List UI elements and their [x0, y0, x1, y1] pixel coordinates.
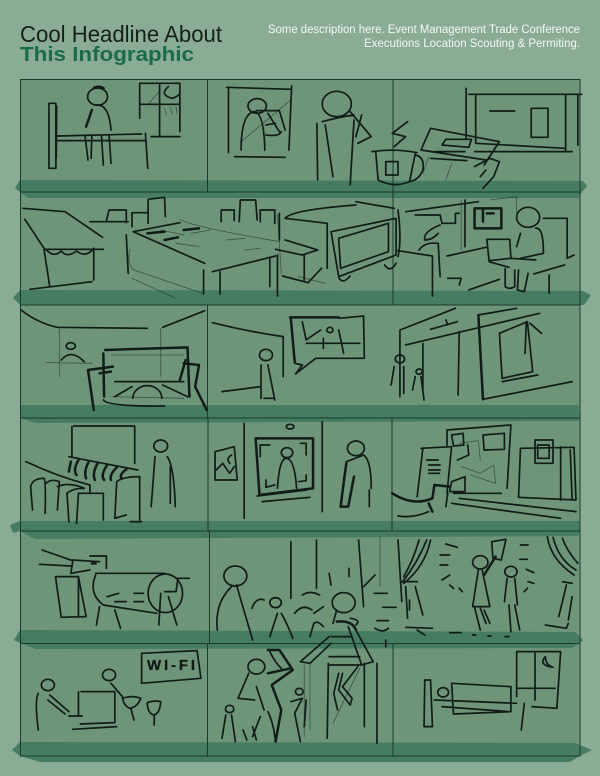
panel: hands holding up phone: [21, 310, 207, 410]
panel: people at doorway: [391, 308, 572, 400]
panel: person at mirror: [227, 86, 371, 185]
description text: Some description here. Event Management Trade Conference: [268, 24, 580, 36]
panel: hand pointing at pinboard: [392, 425, 576, 518]
shelf bands: [10, 180, 592, 762]
description text: Executions Location Scouting & Permiting.: [364, 38, 580, 50]
description text: [268, 24, 580, 50]
title: Cool Headline About: [20, 21, 223, 47]
row 2 and 3 sketches: [21, 197, 574, 410]
panel: hand placing paper on barrel: [39, 550, 189, 628]
row 4 sketches: [26, 422, 576, 523]
rows 5 and 6 sketches: [36, 537, 578, 743]
panel: market stall, street and truck: [23, 197, 400, 298]
panel: person asleep in bed at night: [424, 652, 561, 730]
panel: person with speech bubble: [212, 316, 364, 400]
panel: coffee and notes before board: [372, 88, 582, 188]
wi-fi sign text: WI-FI: [147, 657, 195, 674]
title: This Infographic: [20, 44, 194, 66]
row 1 sketches: [49, 83, 582, 188]
panel: singer and crowd on stage: [217, 537, 578, 743]
panel: wi-fi sign and registration desk: [36, 651, 201, 730]
title: [20, 21, 223, 66]
panel: person sitting on bed by window: [49, 83, 180, 168]
panel: cheering crowd: [222, 650, 306, 742]
panel: gallery with framed portrait: [215, 422, 371, 518]
panel: person on laptop in cafe: [398, 197, 574, 296]
panel: clothes rack and shopper: [26, 426, 175, 523]
